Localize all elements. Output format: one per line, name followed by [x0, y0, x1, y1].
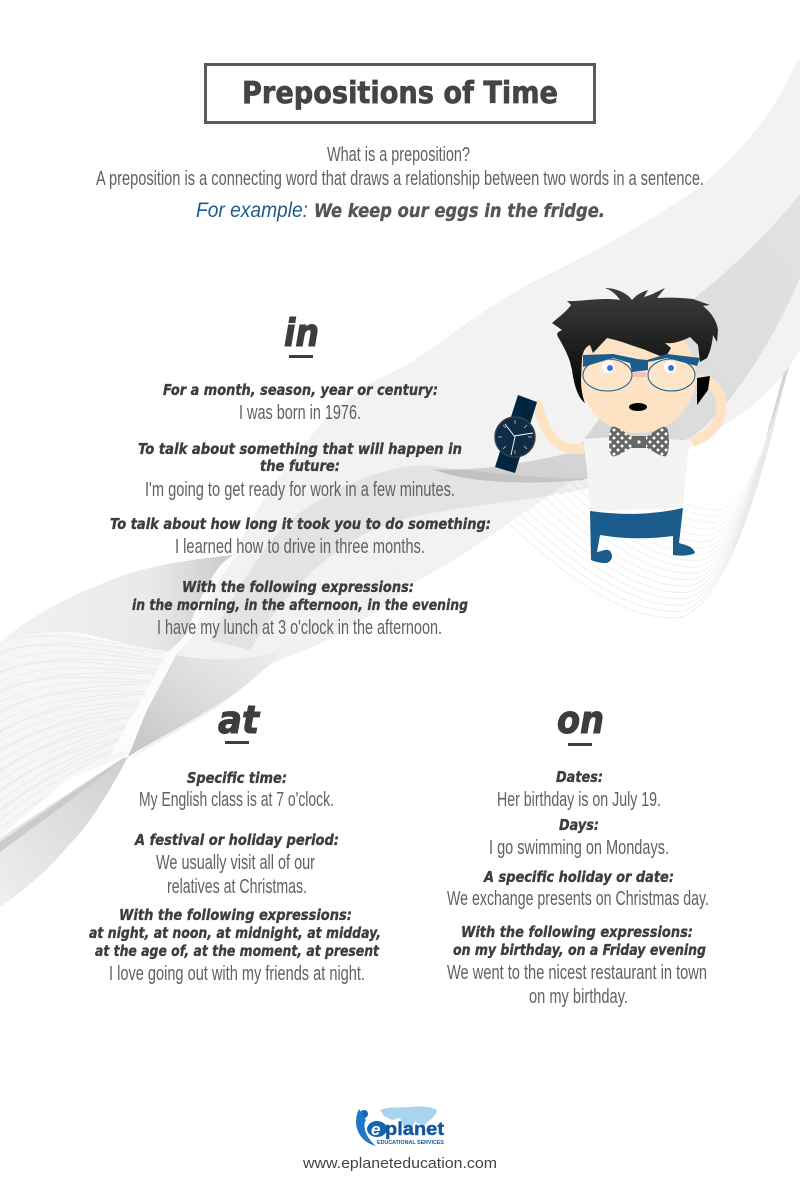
rule: on expressions: With the following expressions: — [461, 923, 693, 941]
rule: days — [489, 816, 669, 859]
ribbon: crossing strand — [128, 645, 287, 757]
title box: Prepositions of Time — [242, 76, 558, 111]
underline: on — [568, 743, 592, 746]
rule: expressions: I have my lunch at 3 o'clock in the afternoon. — [157, 616, 442, 639]
ear hair — [697, 376, 710, 405]
heading: at: at — [218, 698, 261, 742]
left arm — [538, 405, 581, 449]
rule: expressions: in the morning, in the afternoon, in the evening — [132, 596, 468, 614]
background wave ribbon — [0, 60, 800, 907]
rule: on expressions — [447, 923, 707, 1008]
rule: future: I'm going to get ready for work in a few minutes. — [145, 478, 455, 501]
rule: expressions — [132, 578, 468, 639]
rule: holiday or date: A specific holiday or date: — [483, 868, 674, 886]
rule: at expressions: I love going out with my friends at night. — [109, 962, 365, 985]
t-shirt — [583, 436, 693, 511]
title box — [206, 64, 594, 122]
bow tie — [609, 427, 669, 456]
heading: in: in — [284, 311, 319, 355]
rule: specific time: My English class is at 7 o'clock. — [139, 788, 334, 811]
face — [580, 317, 696, 433]
ribbon: lower lined band — [128, 570, 400, 760]
rule: festival: We usually visit all of our — [156, 851, 315, 874]
intro text — [96, 143, 704, 190]
rule: festival — [134, 831, 339, 898]
ribbon: tail dark edge — [0, 757, 125, 852]
glasses — [583, 354, 700, 391]
rule: specific time: Specific time: — [187, 769, 287, 787]
rule: month season year century: I was born in 1976. — [239, 401, 361, 424]
rule: festival: A festival or holiday period: — [134, 831, 339, 849]
rule: month season year century — [163, 381, 438, 424]
rule: days: I go swimming on Mondays. — [489, 836, 669, 859]
intro text: What is a preposition? — [327, 143, 470, 166]
logo: eplanet — [356, 1106, 444, 1146]
underline: at — [225, 741, 249, 744]
rule: on expressions: on my birthday, on a Friday evening — [453, 941, 706, 959]
rule: dates — [497, 768, 661, 811]
ribbon: white highlight stripe — [110, 553, 240, 755]
logo tagline: EDUCATIONAL SERVICES — [377, 1140, 444, 1146]
icon: swoosh and figure: e — [371, 1120, 380, 1139]
ribbon: main light band — [173, 60, 800, 661]
rule: at expressions: at the age of, at the moment, at present — [95, 942, 380, 960]
rule: how long: I learned how to drive in three months. — [175, 535, 425, 558]
example sentence — [196, 199, 605, 222]
hair — [552, 288, 718, 403]
rule: future: To talk about something that will happen in — [138, 440, 462, 458]
rule: at expressions: at night, at noon, at midnight, at midday, — [89, 924, 381, 942]
mouth — [629, 403, 647, 411]
ribbon: lower-left tail — [0, 757, 128, 907]
section: on — [447, 698, 709, 1008]
rule: at expressions — [89, 906, 381, 985]
ribbon: right edge strip — [765, 296, 800, 440]
rule: how long — [110, 515, 491, 558]
logo wordmark: planet — [385, 1119, 444, 1139]
rule: dates: Dates: — [556, 768, 603, 786]
heading: on: on — [557, 698, 604, 742]
right arm — [695, 380, 722, 441]
ribbon: darker band behind character — [433, 194, 800, 483]
rule: at expressions: With the following expressions: — [119, 906, 352, 924]
eyes — [602, 361, 676, 373]
rule: specific time — [139, 769, 334, 811]
ribbon: wave shadow strip — [210, 465, 590, 650]
section: in — [110, 311, 491, 639]
rule: festival: relatives at Christmas. — [167, 875, 307, 898]
trousers and shoes — [590, 508, 695, 563]
icon: wristwatch — [495, 395, 537, 473]
rule: how long: To talk about how long it took you to do something: — [110, 515, 491, 533]
underline: in — [289, 355, 313, 358]
rule: days: Days: — [559, 816, 599, 834]
rule: future — [138, 440, 462, 501]
example sentence: For example: — [196, 199, 308, 222]
icon: world map — [380, 1106, 437, 1131]
ribbon: left lined section — [0, 627, 167, 837]
rule: holiday or date — [447, 868, 709, 910]
ribbon: pale fan lobe at lower right — [505, 300, 800, 618]
rule: future: the future: — [260, 457, 340, 475]
website url: www.eplaneteducation.com — [302, 1155, 497, 1172]
section: at — [89, 698, 381, 985]
rule: month season year century: For a month, season, year or century: — [163, 381, 438, 399]
example sentence: We keep our eggs in the fridge. — [314, 200, 605, 222]
rule: expressions: With the following expressions: — [182, 578, 414, 596]
ribbon: upper-left strand — [0, 555, 233, 652]
nose — [633, 372, 646, 377]
character holding a watch — [495, 288, 722, 563]
rule: on expressions: on my birthday. — [529, 985, 628, 1008]
rule: dates: Her birthday is on July 19. — [497, 788, 661, 811]
